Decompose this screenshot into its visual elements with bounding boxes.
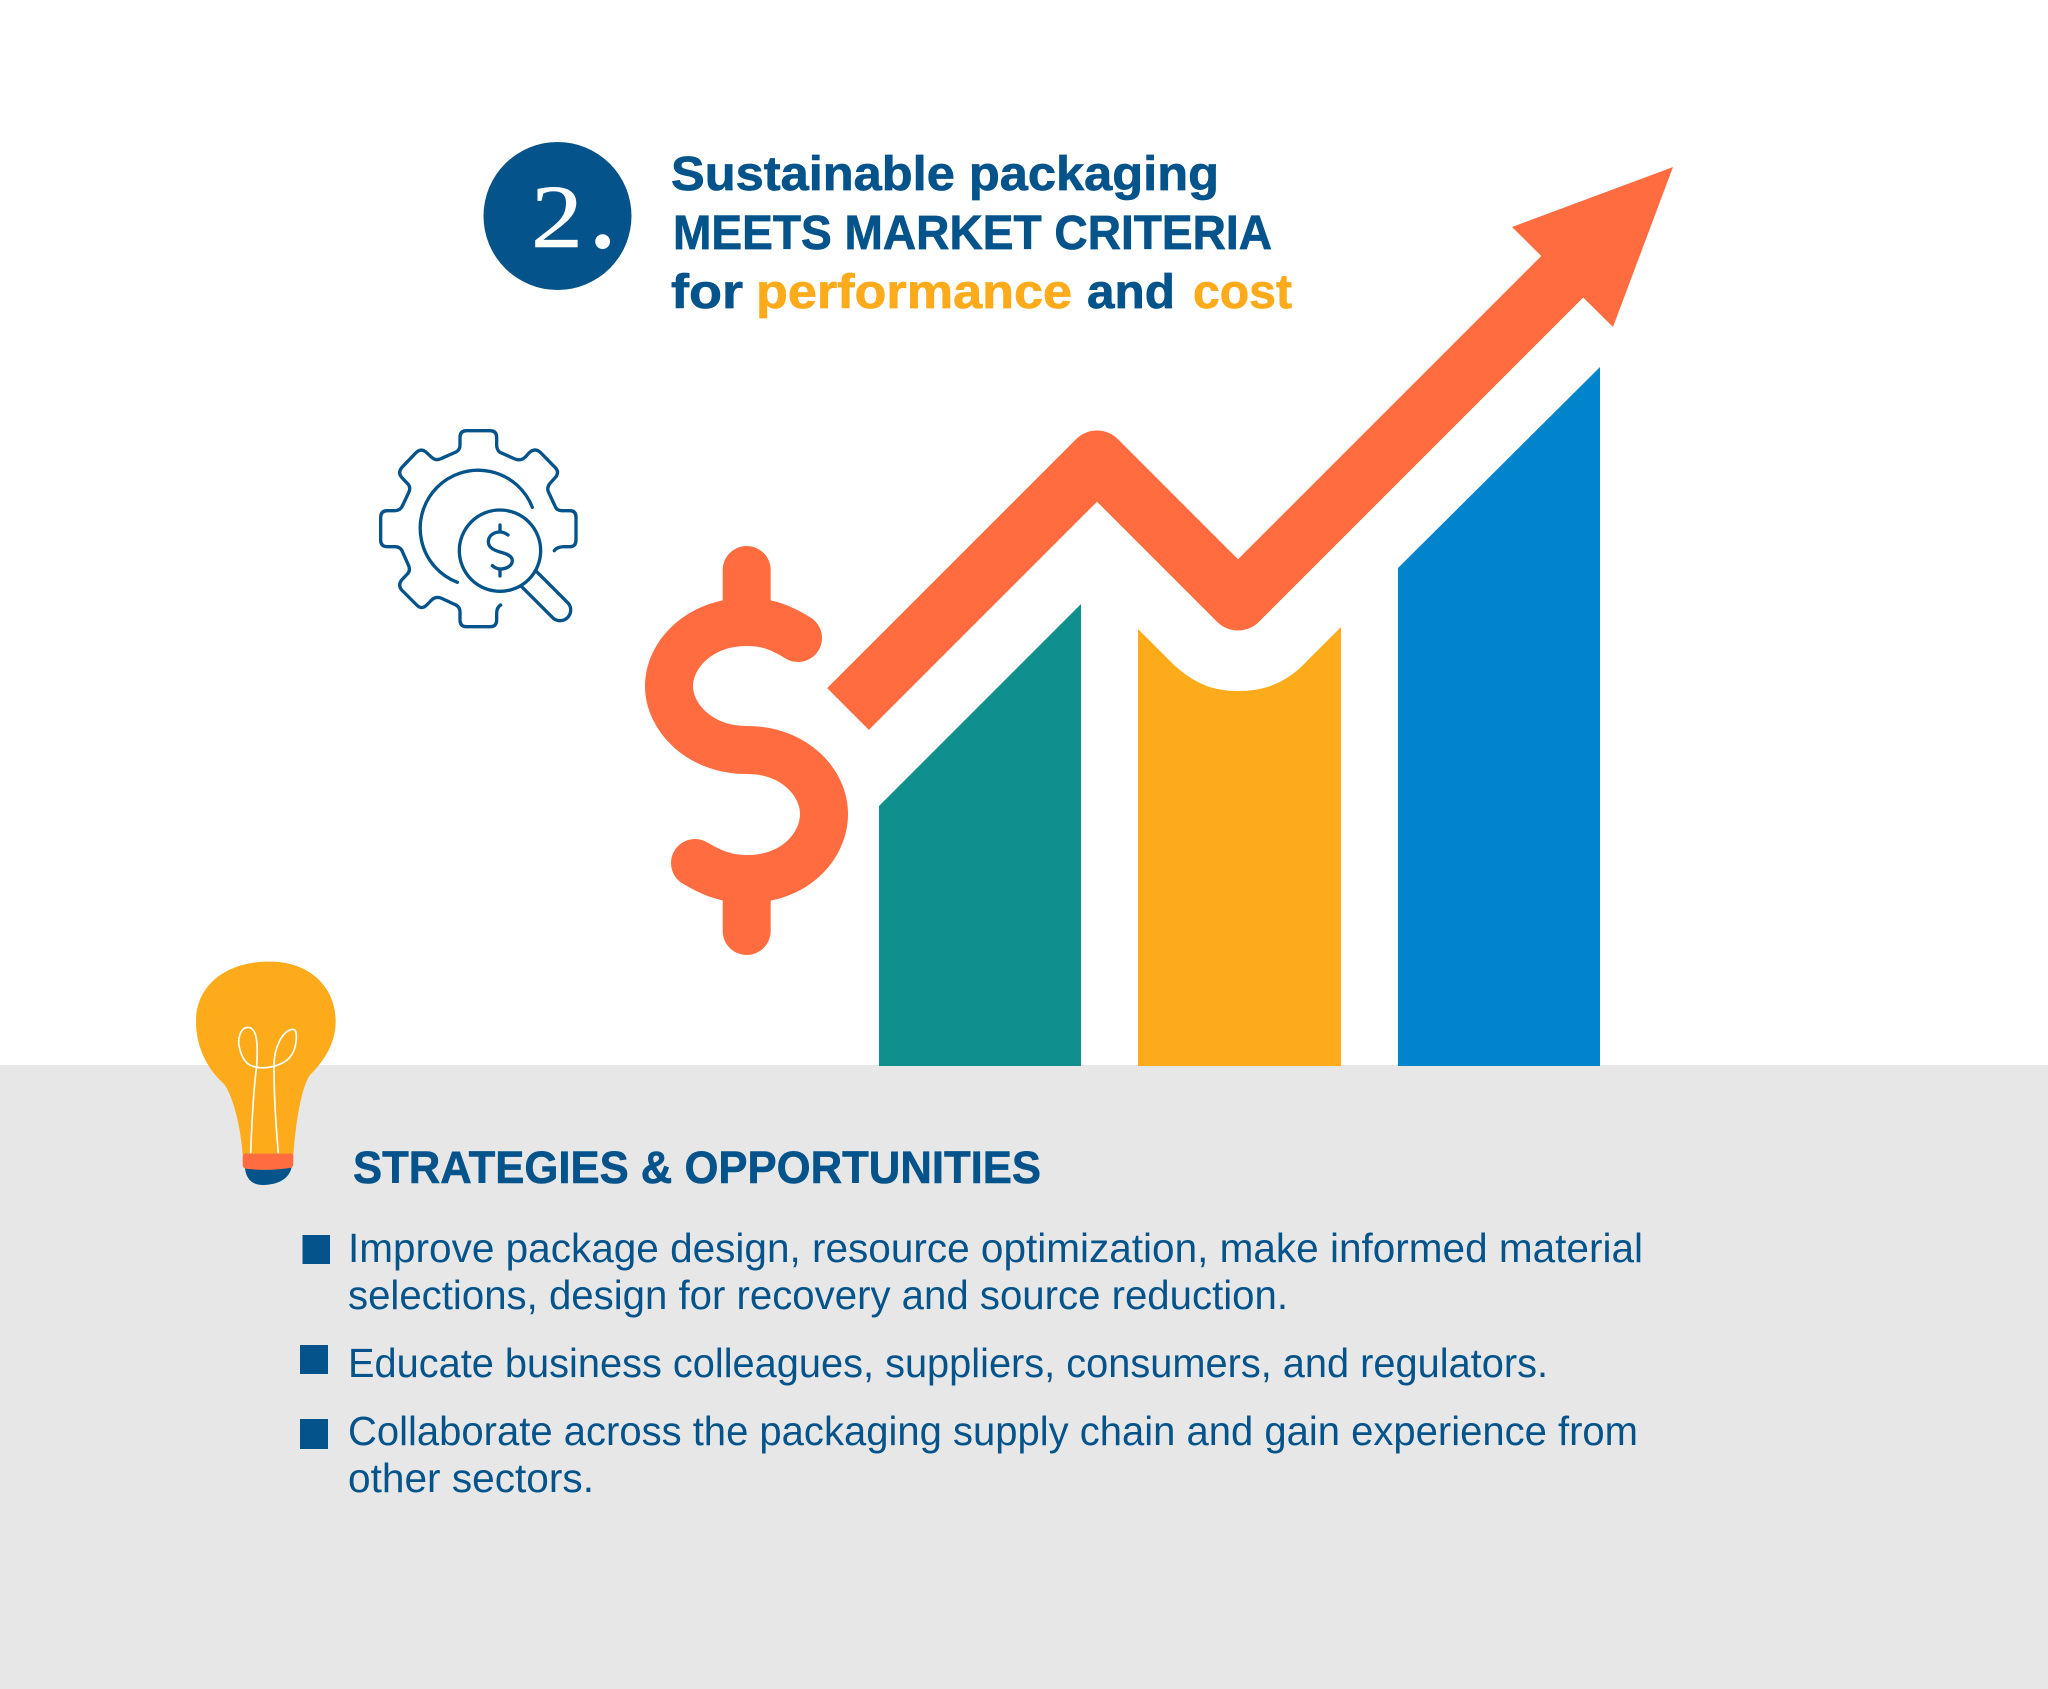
icon: light bulb xyxy=(196,962,336,1185)
title: for xyxy=(671,266,743,319)
title: Sustainable packaging xyxy=(671,148,1219,201)
background panel: strategies xyxy=(0,1065,2048,1689)
bar: teal xyxy=(879,604,1081,1066)
number badge xyxy=(484,137,632,290)
icon: gear with magnifier and dollar xyxy=(381,431,576,627)
list item 1 xyxy=(302,1225,1643,1318)
title: performance xyxy=(756,266,1072,319)
title xyxy=(671,148,1292,319)
icon: dollar sign xyxy=(669,570,824,931)
list item 3 xyxy=(300,1408,1638,1501)
heading: strategies and opportunities: STRATEGIES & OPPORTUNITIES xyxy=(353,1142,1041,1193)
title: MEETS MARKET CRITERIA xyxy=(673,207,1272,260)
list item 3: Collaborate across the packaging supply chain and gain experience from xyxy=(348,1408,1638,1454)
bar chart xyxy=(879,367,1600,1066)
list item 3: other sectors. xyxy=(348,1455,594,1501)
arrow: rising trend xyxy=(848,167,1673,709)
list item 1: selections, design for recovery and source reduction. xyxy=(348,1272,1288,1318)
bar: yellow xyxy=(1138,627,1341,1066)
title: cost xyxy=(1193,266,1292,319)
bar: blue xyxy=(1398,367,1600,1066)
number badge: . xyxy=(587,137,618,275)
title: and xyxy=(1087,266,1175,319)
list item 2: Educate business colleagues, suppliers, consumers, and regulators. xyxy=(348,1340,1548,1386)
list item 1: Improve package design, resource optimization, make informed material xyxy=(348,1225,1643,1271)
number badge: 2 xyxy=(531,168,583,267)
